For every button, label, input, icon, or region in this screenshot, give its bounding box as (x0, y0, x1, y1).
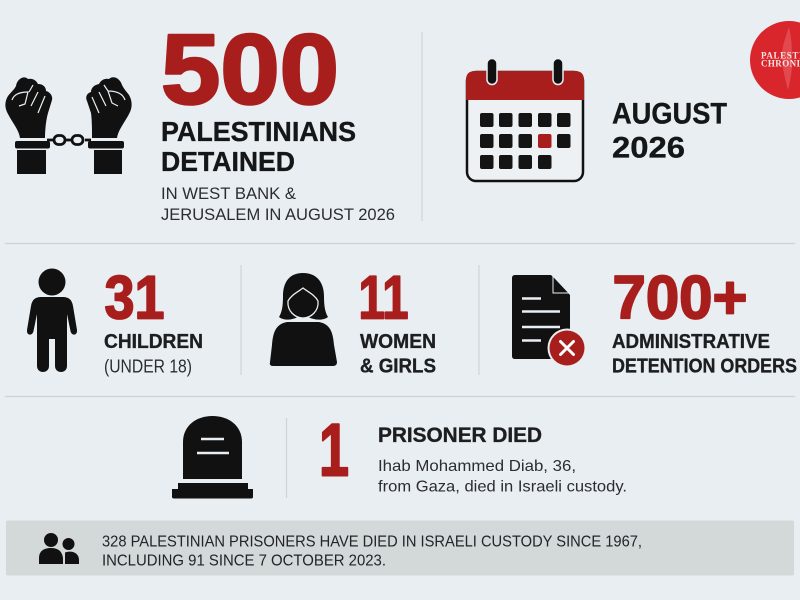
stat: administrative detention orders: ADMINISTRATIVE (612, 331, 770, 353)
stat: children: (UNDER 18) (104, 356, 192, 376)
stat: prisoner died text: Ihab Mohammed Diab, 36, (378, 458, 576, 475)
icon: people (39, 533, 79, 564)
stat: children: CHILDREN (104, 331, 203, 353)
stat: prisoner died text (378, 423, 627, 496)
logo: Palestine Chronicle (750, 21, 800, 99)
date label: 2026 (612, 132, 685, 164)
callout text: 328 PALESTINIAN PRISONERS HAVE DIED IN ISRAELI CUSTODY SINCE 1967, (102, 534, 642, 550)
icon: cuffed fists (5, 77, 132, 174)
icon: gravestone (172, 416, 253, 498)
stat: children (104, 264, 203, 376)
stat: prisoner died number: 1 (319, 408, 349, 492)
stat: women and girls (358, 264, 436, 378)
icon: woman (270, 273, 337, 366)
stat: prisoner died text: from Gaza, died in Israeli custody. (378, 478, 627, 496)
headline subtext: IN WEST BANK & (161, 184, 297, 203)
headline subtext (161, 184, 395, 224)
callout text (102, 534, 642, 570)
icon: rejected document (512, 275, 586, 368)
icon: calendar (466, 58, 584, 181)
stat: administrative detention orders (612, 264, 797, 378)
callout band (6, 520, 794, 576)
date label: AUGUST (612, 98, 727, 130)
stat: children: 31 (104, 264, 164, 332)
headline label: PALESTINIANS (161, 116, 356, 147)
date label (612, 98, 727, 164)
stat: prisoner died text: PRISONER DIED (378, 423, 542, 447)
headline number: 500: 500 (161, 14, 339, 124)
stat: women and girls: & GIRLS (360, 356, 436, 378)
headline label: DETAINED (161, 146, 295, 177)
icon: child (27, 268, 77, 372)
stat: women and girls: 11 (358, 264, 408, 332)
callout text: INCLUDING 91 SINCE 7 OCTOBER 2023. (102, 552, 386, 570)
headline label (161, 116, 356, 177)
headline subtext: JERUSALEM IN AUGUST 2026 (161, 205, 395, 224)
stat: administrative detention orders: 700+ (612, 264, 748, 332)
stat: women and girls: WOMEN (360, 331, 436, 353)
